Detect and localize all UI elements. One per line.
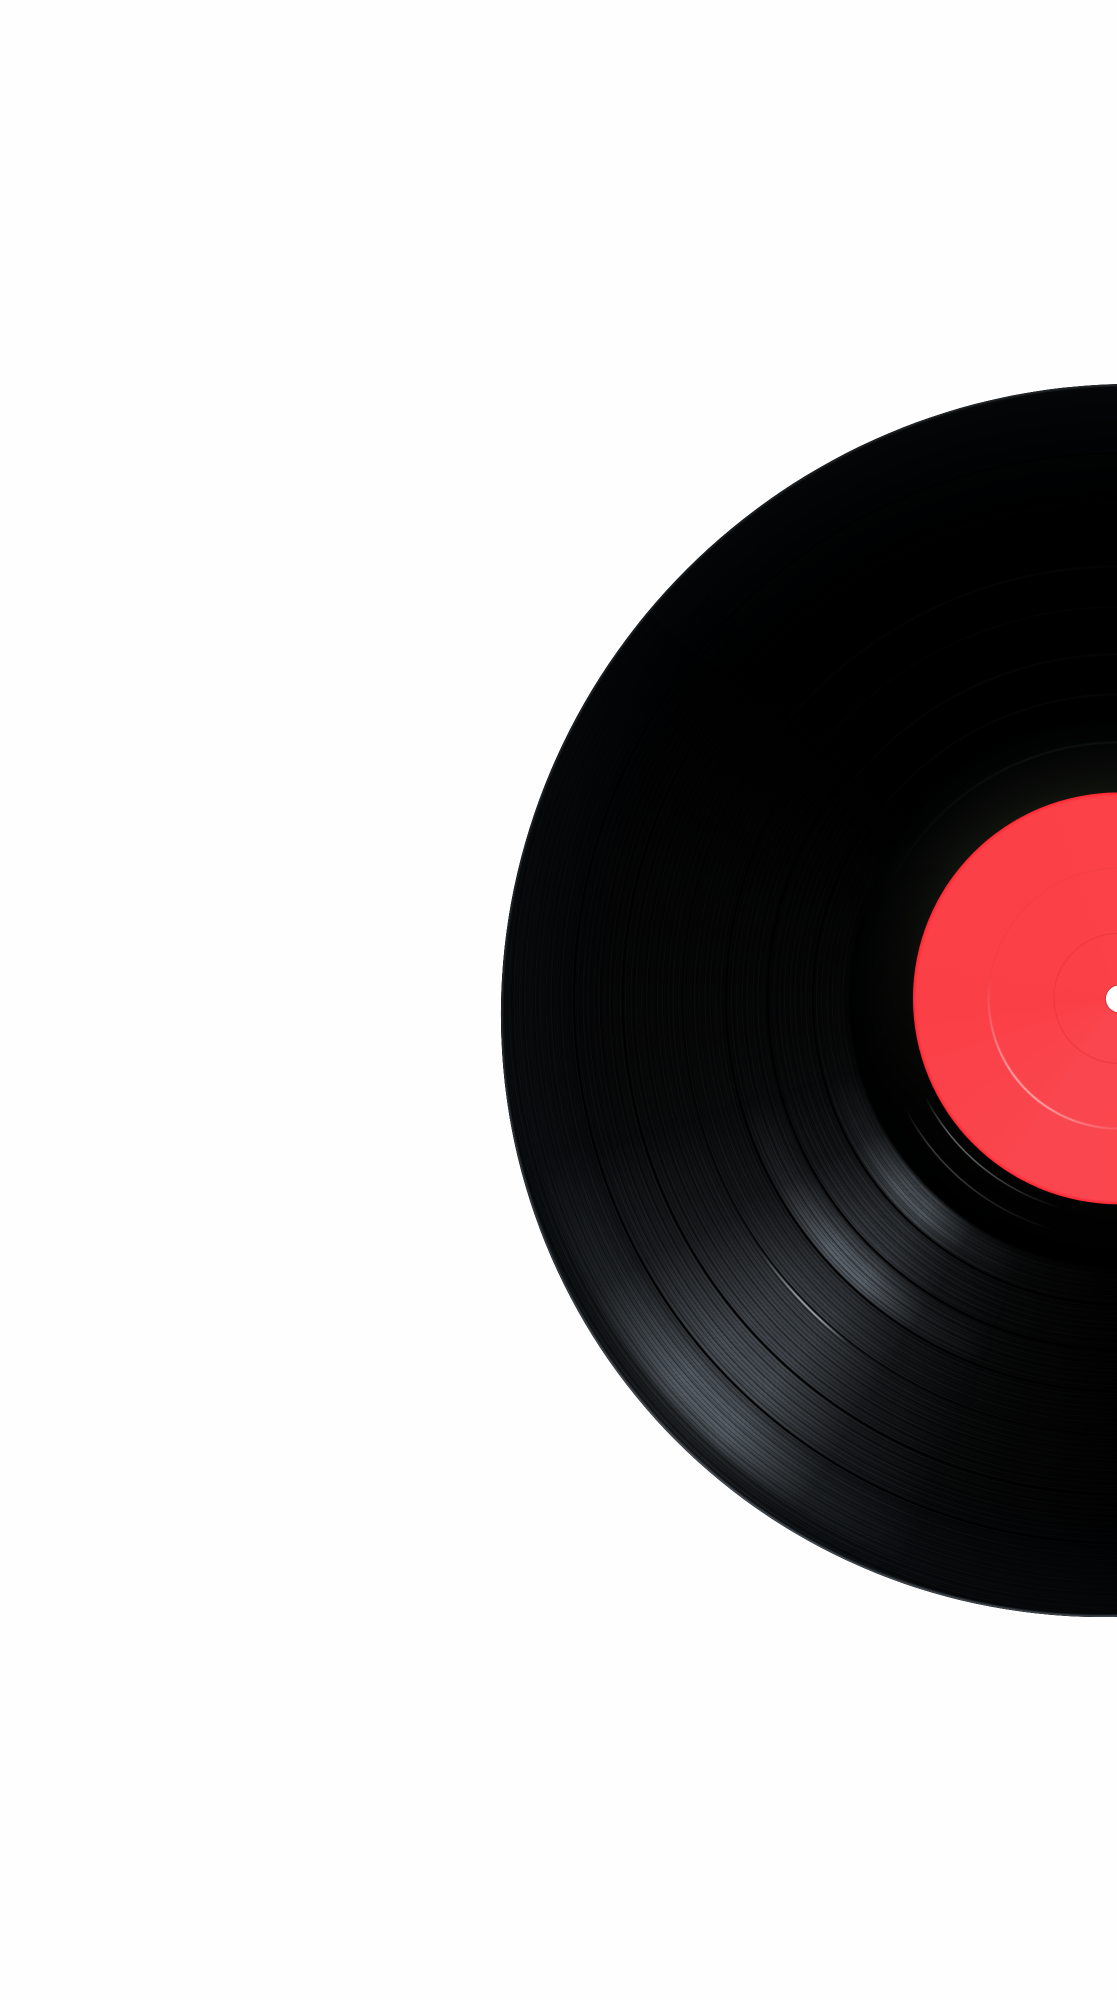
- fine groove streaks: [501, 1034, 982, 1603]
- upper track grooves: [974, 742, 1117, 787]
- spindle hole: [1105, 985, 1117, 1012]
- vinyl surface: [418, 298, 1117, 1698]
- track separator grooves: [418, 298, 1117, 1698]
- bright groove glint: [762, 1253, 847, 1342]
- record rim: [501, 384, 1117, 1617]
- vinyl record: [500, 384, 1117, 1617]
- label ring highlight: [988, 986, 1117, 1130]
- label inner ring: [912, 792, 1117, 1204]
- run-out groove glints: [908, 1100, 1054, 1225]
- dead wax glow around label: [900, 763, 1117, 1020]
- light reflection on grooves: [567, 1105, 987, 1526]
- red centre label: [912, 792, 1117, 1204]
- label outer ring: [912, 792, 1117, 1204]
- wide light reflection: [532, 1048, 1028, 1562]
